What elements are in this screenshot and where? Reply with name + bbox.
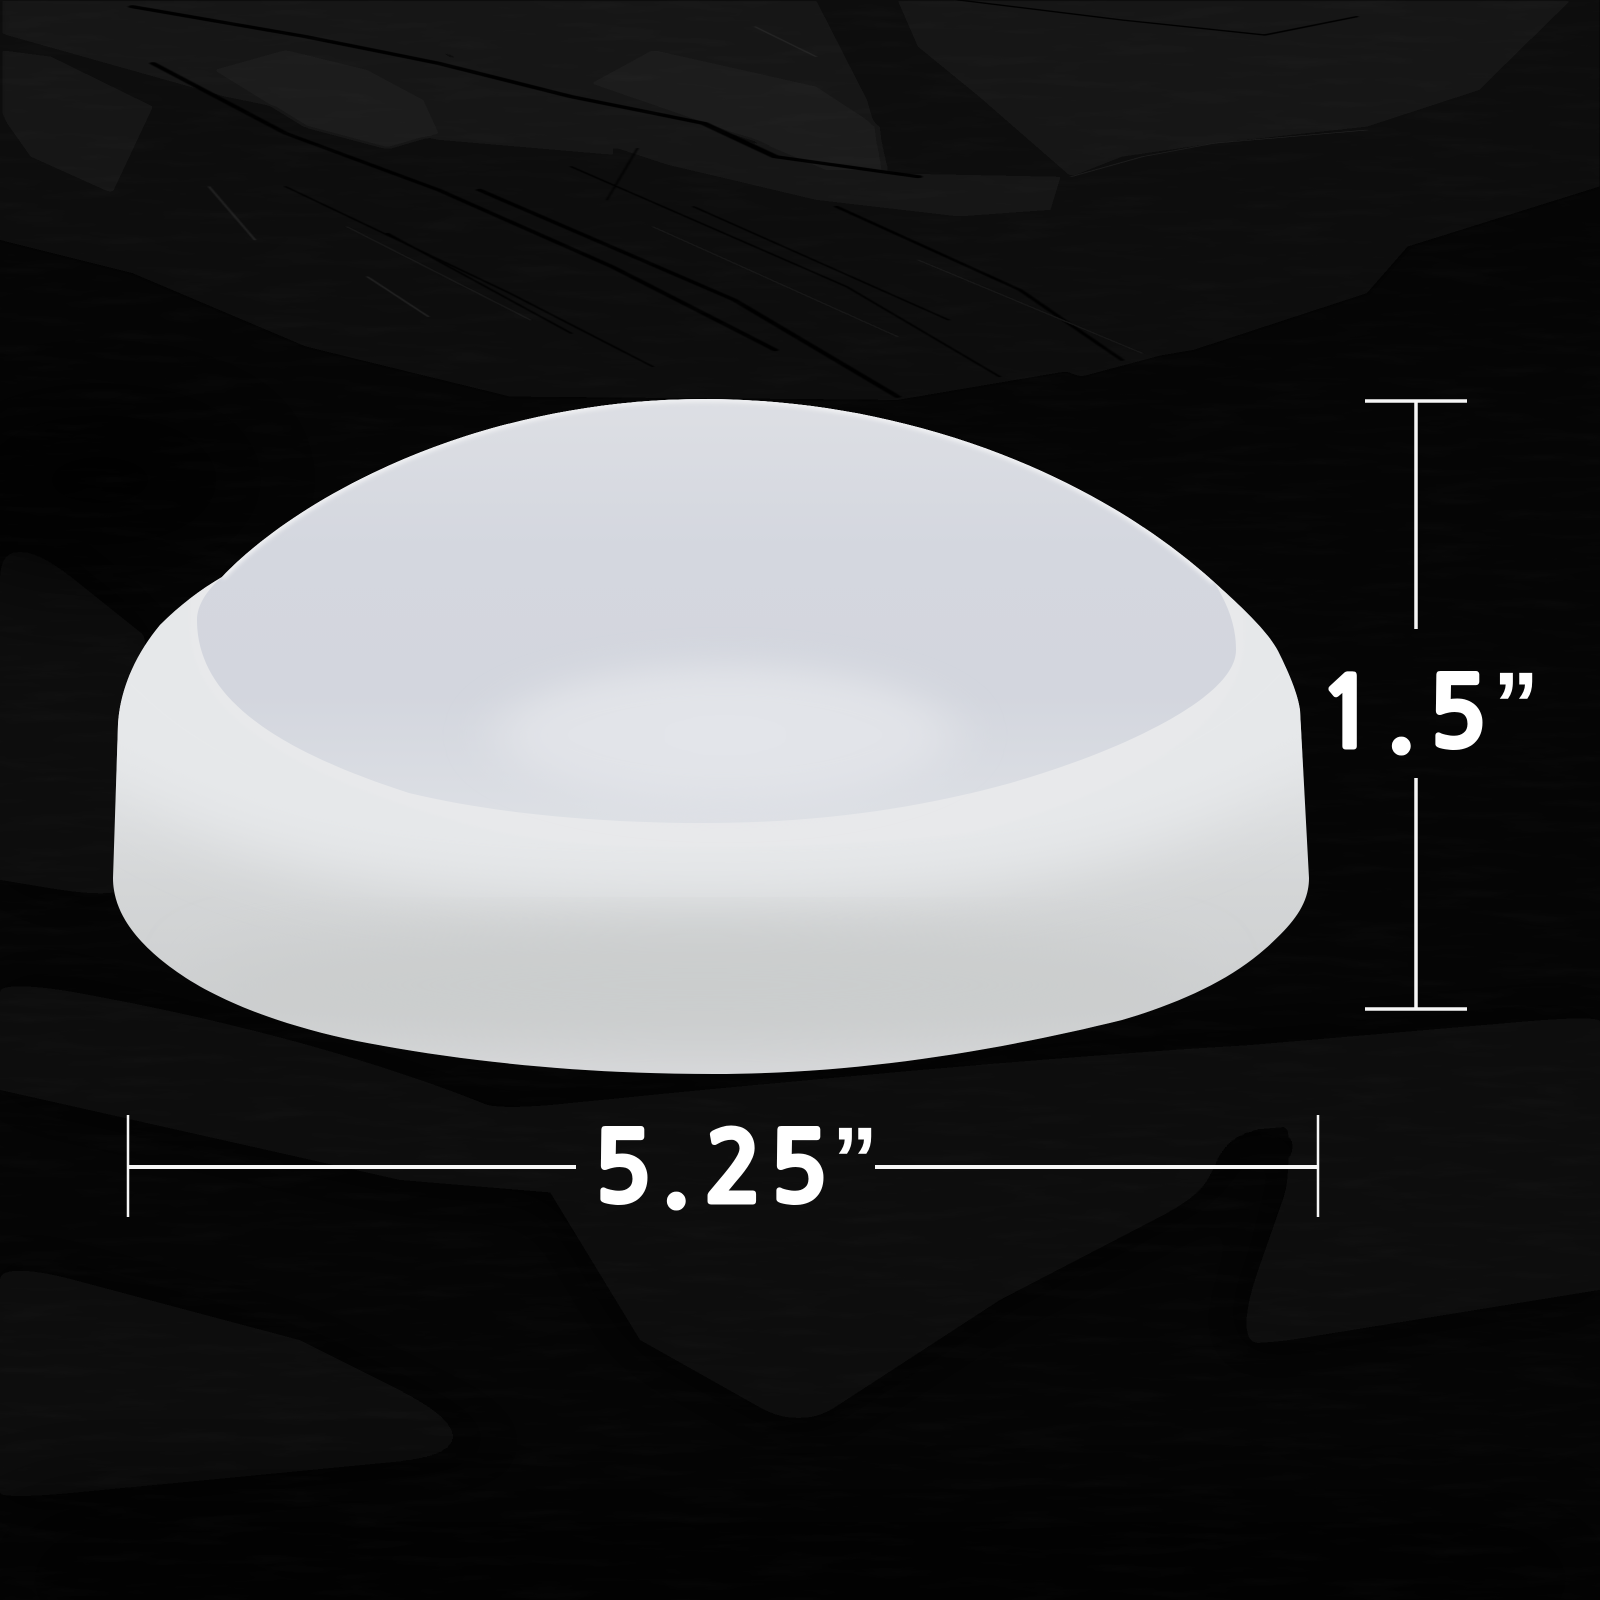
- recessed ring: [190, 399, 1244, 610]
- housing shading: [60, 399, 1360, 1040]
- width value: ”: [832, 1109, 878, 1211]
- width value: .: [661, 1121, 690, 1217]
- height value: ”: [1493, 654, 1539, 756]
- height value: 1: [1318, 666, 1377, 762]
- fixture housing: [113, 399, 1309, 1074]
- rock plates, upper area: [0, 0, 1599, 400]
- dome highlight: [514, 668, 936, 780]
- width value: 5: [593, 1121, 652, 1217]
- mid and lower shading: [0, 520, 1600, 1500]
- height bracket: [1365, 401, 1467, 1009]
- width dimension: 5.25 inches: [128, 1109, 1318, 1217]
- height dimension: 1.5 inches: [1318, 401, 1539, 1009]
- width bracket: [128, 1115, 1318, 1217]
- height value: 5: [1428, 666, 1487, 762]
- width value: 2: [704, 1121, 763, 1217]
- width value: 5: [769, 1121, 828, 1217]
- dome lens: [197, 399, 1236, 823]
- product: round LED light fixture: [60, 399, 1360, 1074]
- dome top edge: [222, 399, 1214, 582]
- dark cracks: [133, 0, 1367, 397]
- height value: .: [1386, 666, 1415, 762]
